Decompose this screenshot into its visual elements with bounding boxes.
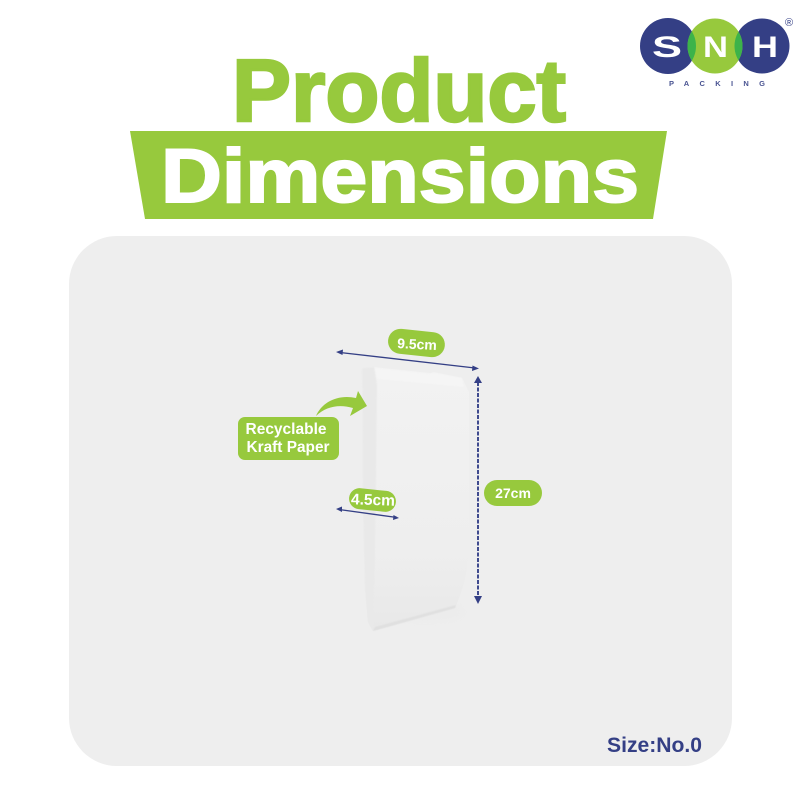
panel: product background xyxy=(69,236,732,766)
logo: SNH Packing: PACKING xyxy=(669,79,765,88)
dimension arrow: width 9.5cm xyxy=(336,350,479,371)
callout arrow xyxy=(316,391,367,416)
callout: Recyclable Kraft Paper xyxy=(238,417,339,460)
logo: SNH Packing: N xyxy=(703,31,728,64)
logo: SNH Packing xyxy=(640,17,793,88)
title: Product: Product xyxy=(232,41,566,140)
callout: Recyclable Kraft Paper: Recyclable xyxy=(246,421,327,438)
label: 9.5cm xyxy=(387,328,446,358)
product: paper bag xyxy=(362,367,469,631)
size label: Size:No.0 xyxy=(607,734,702,757)
title banner: Dimensions: Dimensions xyxy=(161,134,639,219)
logo: SNH Packing: S xyxy=(652,31,682,64)
label: 9.5cm: 9.5cm xyxy=(397,335,437,353)
label: 27cm xyxy=(484,480,542,506)
callout: Recyclable Kraft Paper: Kraft Paper xyxy=(246,439,330,456)
logo: SNH Packing: H xyxy=(752,31,778,64)
label: 27cm: 27cm xyxy=(495,485,531,501)
label: 4.5cm xyxy=(348,487,397,513)
dimension arrow: height 27cm xyxy=(474,376,482,604)
label: 4.5cm: 4.5cm xyxy=(351,491,395,510)
dimension arrow: depth 4.5cm xyxy=(336,506,399,520)
logo: SNH Packing: ® xyxy=(785,17,793,29)
